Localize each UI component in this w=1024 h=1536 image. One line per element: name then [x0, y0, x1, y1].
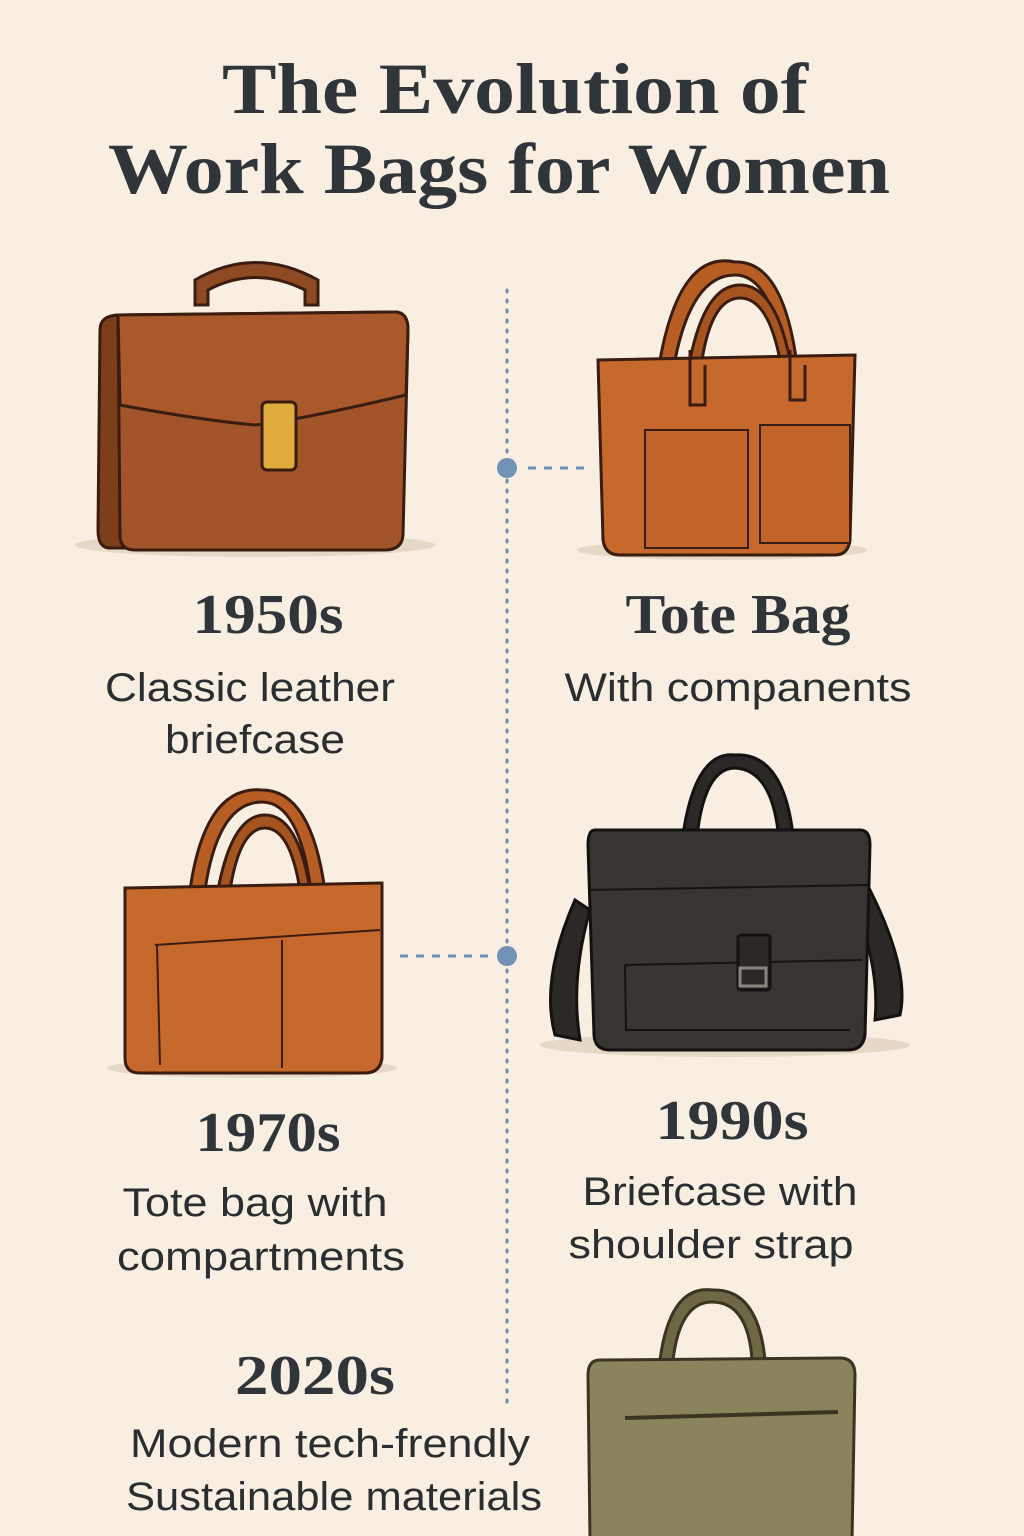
- label: 1970s: [117, 1102, 405, 1279]
- icon: 2020s olive bag: [588, 1290, 855, 1536]
- label: 2020s: 2020s: [235, 1345, 395, 1407]
- label: 1950s: briefcase: [165, 718, 345, 762]
- icon: tote bag top: [577, 261, 867, 560]
- label: 1970s: Tote bag with: [122, 1181, 388, 1225]
- label: 1990s: shoulder strap: [568, 1223, 854, 1267]
- icon: 1970s tote: [107, 790, 397, 1078]
- label: tote bag: With companents: [564, 666, 912, 710]
- label: 1970s: compartments: [117, 1235, 405, 1279]
- timeline: [400, 290, 585, 1410]
- title: [108, 49, 890, 209]
- label: tote bag: Tote Bag: [626, 584, 850, 646]
- label: 2020s: Modern tech-frendly: [130, 1422, 530, 1466]
- label: 1990s: 1990s: [656, 1090, 808, 1152]
- label: 1950s: [105, 584, 395, 762]
- label: 1970s: 1970s: [196, 1102, 340, 1164]
- title: The Evolution of: [222, 49, 809, 129]
- title: Work Bags for Women: [108, 129, 890, 209]
- icon: 1990s briefcase: [540, 755, 910, 1057]
- label: 2020s: Sustainable materials: [126, 1475, 542, 1519]
- icon: 1950s briefcase: [75, 262, 435, 557]
- label: 1990s: Briefcase with: [582, 1170, 858, 1214]
- label: tote bag: [564, 584, 912, 710]
- label: 1950s: Classic leather: [105, 666, 395, 710]
- label: 1950s: 1950s: [192, 584, 344, 646]
- label: 2020s: [126, 1345, 542, 1519]
- label: 1990s: [568, 1090, 858, 1267]
